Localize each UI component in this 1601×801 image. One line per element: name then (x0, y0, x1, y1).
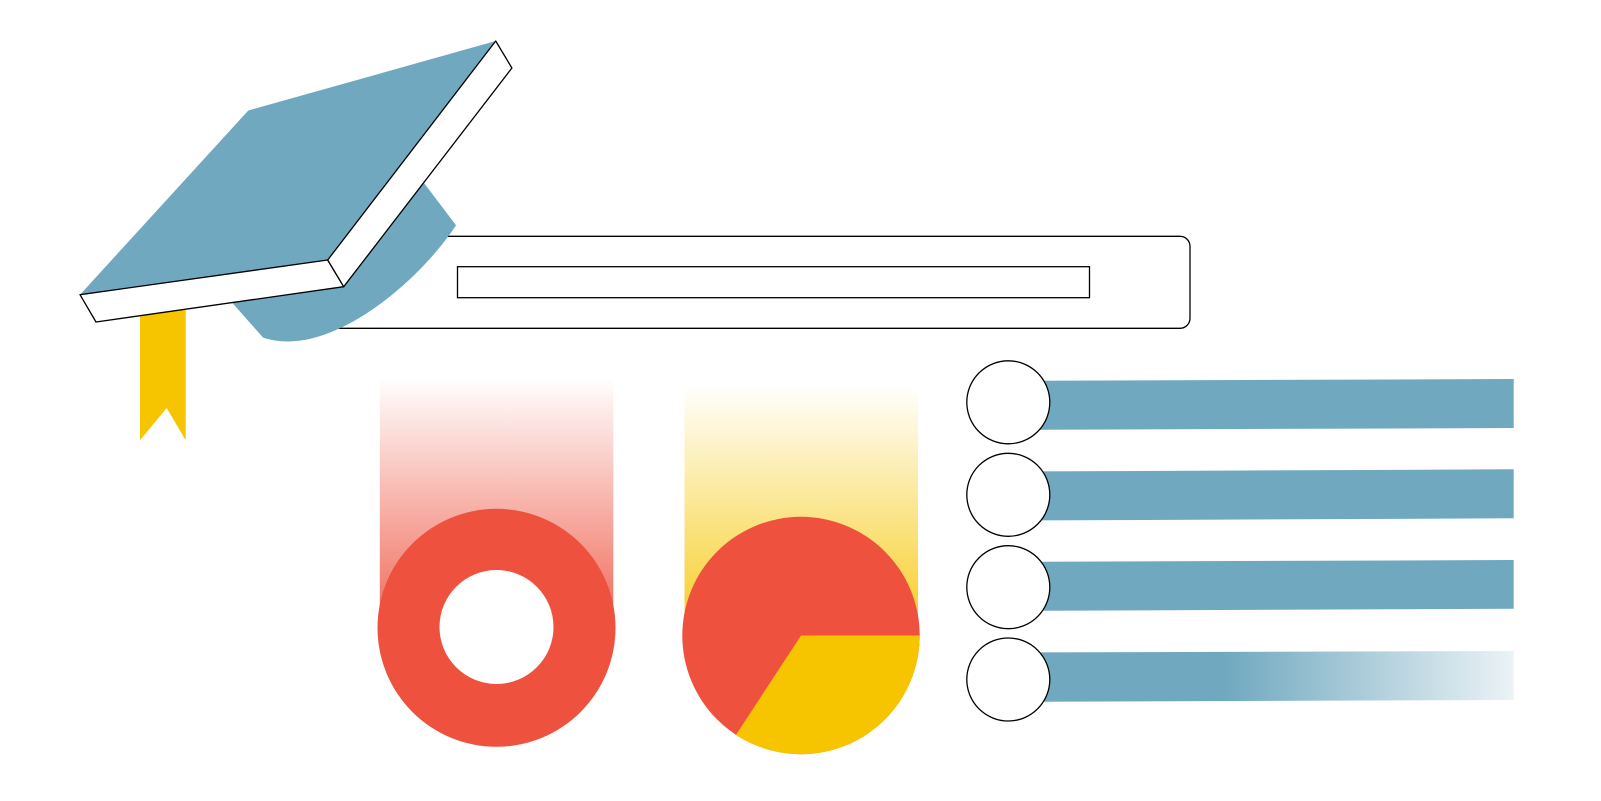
title input box (458, 267, 1090, 298)
icon: graduation cap (80, 41, 512, 440)
panel: list (967, 361, 1514, 721)
title banner (300, 236, 1190, 328)
cap tassel ribbon (140, 304, 186, 440)
cap top board (80, 41, 496, 295)
panel: pie chart (682, 385, 920, 754)
list row 1 (967, 361, 1514, 444)
list row 3 (967, 546, 1514, 629)
pie slice yellow (736, 636, 920, 754)
cap side edge (328, 41, 512, 287)
list row 4 (967, 638, 1514, 721)
list row 2 (967, 453, 1514, 536)
panel: donut chart (378, 378, 616, 747)
pie base red (682, 517, 920, 754)
yellow gradient column (684, 385, 918, 635)
cap front edge (80, 260, 344, 322)
red gradient column (380, 378, 613, 628)
cap base (228, 183, 456, 341)
donut ring (378, 509, 616, 747)
